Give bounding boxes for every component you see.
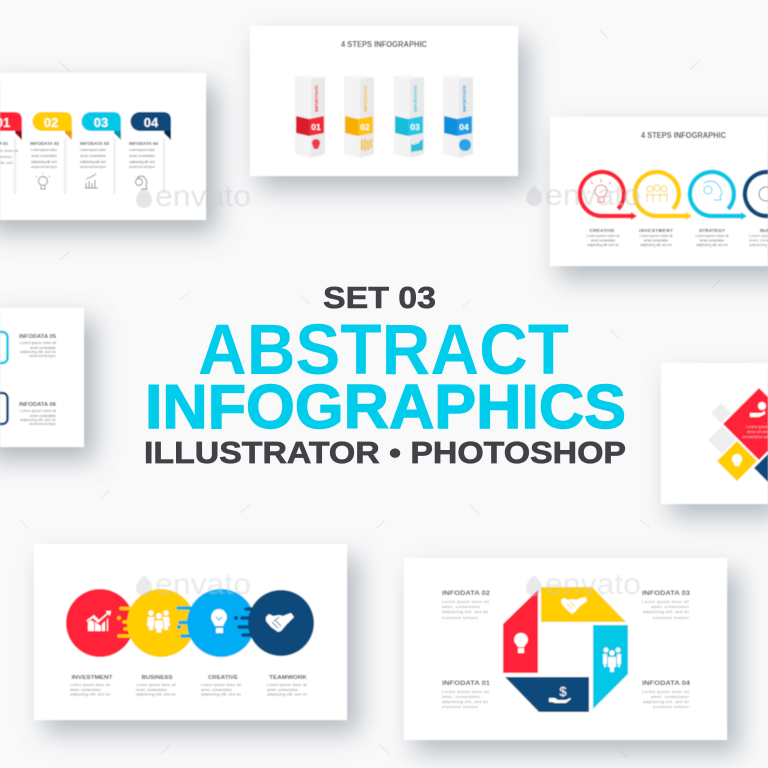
text: infodata 02: adipiscing elit, sed do [442,609,489,614]
icon: people [147,610,170,633]
text: infodata 04: eiusmod tempor [653,704,690,709]
circle: red investment [66,589,134,657]
icon: light bulb [732,454,742,466]
column text 02: amet, consectetur [31,153,58,158]
text: infodata 02: INFODATA 02 [442,590,490,597]
column text 02: Lorem ipsum dolor [31,147,58,152]
watermark: envato bottom right: envato [545,568,641,601]
column 01: IMPORTANTE [314,85,319,112]
label: strategy [696,228,729,247]
label: business [749,228,768,247]
watermark: envato bottom left: envato [155,568,251,601]
text: infodata 06: adipiscing elit, sed do [20,417,57,422]
icon: light bulb [514,633,528,653]
icon: light bulb [211,609,227,633]
icon: hand with coin [750,402,766,417]
navy diamond [754,454,768,482]
text: infodata 01: eiusmod tempor [442,704,479,709]
connector: navy dashes [239,609,254,635]
text: infodata 01: adipiscing elit, sed do [442,699,489,704]
heading: 4 STEPS INFOGRAPHIC [341,40,427,49]
label: business: Lorem ipsum dolor sit [136,682,177,687]
label: business: amet, consectetur [136,687,168,692]
label: creative: adipiscing elit, sed do [201,692,242,696]
text: infodata 05: INFODATA 05 [19,334,56,340]
text: infodata 05 [19,334,57,358]
column 02: 02 [360,122,370,132]
panel: 3D columns card [250,26,528,189]
label: strategy: adipiscing elit, sed do [696,242,729,247]
text: infodata 04 [642,680,690,709]
tab 03: 03 [94,115,108,130]
label: investment: INVESTMENT [639,228,673,234]
connector: blue dashes [178,608,193,636]
column text 04: INFODATA 04 [129,141,158,146]
box 06 [0,393,8,424]
heading: 4 STEPS INFOGRAPHIC [641,131,726,140]
icon: handshake [561,597,587,614]
label: creative: Lorem ipsum dolor sit [586,233,620,238]
tab 04 [130,112,171,140]
title block [144,280,626,470]
tab 02: 02 [44,115,58,130]
label: strategy: Lorem ipsum dolor sit [696,233,729,238]
label: investment: amet, consectetur [644,238,669,242]
text: infodata 05: adipiscing elit, sed do [20,349,57,354]
text: infodata 02 [442,590,490,620]
segment: red [503,590,538,673]
column text 03: eiusmod tempor [80,164,107,169]
box 05 [0,332,8,363]
text: infodata 01 [442,680,490,709]
label: investment: adipiscing elit, sed do [70,692,111,696]
icon: handshake [266,613,294,632]
column text 03 [80,141,109,169]
label: business: adipiscing elit, sed do [136,692,177,696]
column text 04 [129,141,158,169]
icon: light bulb [588,179,614,202]
label: teamwork: TEAMWORK [269,675,308,681]
panel: diamonds card [661,363,768,517]
column 03 [394,75,424,158]
circle: yellow business [117,589,195,657]
text: infodata 05: eiusmod tempor [29,353,57,358]
grey diamond large [708,426,736,454]
column 02 [344,75,374,158]
column 01 [295,75,325,158]
tab 02 [32,112,72,140]
column 04: IMPORTANTE [462,85,467,112]
icon: head outline [136,176,147,189]
text: infodata 01: Lorem ipsum dolor sit [442,689,490,694]
column text 04: Lorem ipsum dolor [129,147,156,152]
text: infodata 06: eiusmod tempor [29,421,57,426]
column text 04: amet, consectetur [129,153,156,158]
text: infodata 06: Lorem ipsum dolor sit [20,408,57,413]
column text 02 [30,141,59,169]
text: infodata 03: INFODATA 03 [642,590,690,597]
icon: light bulb outline [36,173,50,189]
label: creative: CREATIVE [590,228,615,234]
text: infodata 05: Lorem ipsum dolor sit [20,340,57,345]
text: infodata 01: amet, consectetur [442,694,481,699]
label: creative [201,675,242,696]
watermark: envato top left: envato [155,180,251,213]
circle: blue creative [177,589,255,657]
arrow circle: business [745,172,768,216]
text: infodata 05: amet, consectetur [30,345,57,350]
label: creative: amet, consectetur [201,687,233,692]
icon: people [647,185,667,202]
icon: bar chart growth [87,611,111,631]
circle: navy teamwork [234,590,314,656]
column text 02: adipiscing elit, sed [31,159,57,164]
label: teamwork: Lorem ipsum dolor sit [267,682,308,687]
icon: people [603,648,621,672]
text: infodata 04: amet, consectetur [651,694,690,699]
column text 01 [0,141,19,165]
text: infodata 02: amet, consectetur [442,604,481,609]
text: infodata 02: eiusmod tempor [442,615,479,620]
column text 03: amet, consectetur [80,153,107,158]
label: teamwork [267,675,308,696]
label: creative: adipiscing elit, sed do [587,242,620,247]
column 03: IMPORTANTE [413,85,418,112]
text: infodata 04: adipiscing elit, sed do [643,699,690,704]
label: investment: adipiscing elit, sed do [640,242,673,247]
title: set 03: SET 03 [323,280,436,315]
tab 04: 04 [144,115,159,130]
label: strategy: amet, consectetur [700,238,725,242]
label: investment [639,228,673,247]
column text 02: INFODATA 02 [30,141,59,146]
grey diamond small [711,403,731,423]
icon: growth chart outline [85,174,98,188]
label: investment: Lorem ipsum dolor sit [640,233,673,238]
text: infodata 04: INFODATA 04 [642,680,690,687]
label: business: BUSINESS [142,675,173,681]
connector: yellow dashes [119,608,136,636]
icon: hand with dollar: $ [559,684,567,699]
label: teamwork: amet, consectetur [267,687,299,692]
segment: cyan [593,625,628,709]
tab 03 [82,112,121,140]
text: infodata 01: INFODATA 01 [442,680,490,687]
label: creative [586,228,620,247]
column text 04: eiusmod tempor [129,164,156,169]
arrow circle: creative [580,172,637,220]
column text 02: eiusmod tempor [31,164,58,169]
label: teamwork: adipiscing elit, sed do [267,692,308,696]
column 04: 04 [459,122,469,132]
text: infodata 03: amet, consectetur [651,604,690,609]
column text 03: adipiscing elit, sed [80,159,106,164]
text: infodata 03: adipiscing elit, sed do [643,609,690,614]
segment: yellow [541,587,626,622]
label: creative: Lorem ipsum dolor sit [201,682,242,687]
icon: head [704,181,722,200]
column 03: 03 [410,122,420,132]
label: business [136,675,177,696]
text: infodata 06 [19,402,57,426]
label: investment: INVESTMENT [72,675,113,681]
label: creative: CREATIVE [208,675,238,681]
title: abstract: ABSTRACT [198,311,569,390]
column 04 [443,75,473,158]
title: infographics: INFOGRAPHICS [145,373,626,442]
text: lorem [742,424,768,439]
panel: octagon card [404,558,739,753]
label: strategy: STRATEGY [699,228,726,234]
panel: ribbon tabs card [0,73,216,232]
text: infodata 04: Lorem ipsum dolor sit [642,689,690,694]
label: creative: amet, consectetur [590,238,616,242]
column text 04: adipiscing elit, sed [129,159,155,164]
column 02: IMPORTANTE [363,85,368,112]
column 01: 01 [311,122,321,132]
red diamond [723,388,768,460]
watermark: envato top right: envato [545,179,641,212]
label: investment: amet, consectetur [70,687,102,692]
text: infodata 06: INFODATA 06 [19,402,56,408]
panel: circular arrows card [550,117,768,279]
text: infodata 02: Lorem ipsum dolor sit [442,599,490,604]
text: infodata 03: eiusmod tempor [653,615,690,620]
column text 03: INFODATA 03 [80,141,109,146]
text: infodata 03 [642,590,690,620]
segment: navy [505,677,589,712]
title: illustrator photoshop: ILLUSTRATOR • PHOTOSHOP [144,435,626,470]
yellow diamond [717,441,757,481]
label: investment: Lorem ipsum dolor sit [70,682,111,687]
text: infodata 06: amet, consectetur [30,413,57,418]
arrow circle: investment [635,172,692,220]
label: investment [70,675,113,696]
panel: joined circles card [34,544,359,733]
panel: rounded boxes card [0,308,94,459]
text: infodata 03: Lorem ipsum dolor sit [642,599,690,604]
column text 03: Lorem ipsum dolor [80,147,107,152]
tab 01 [0,112,22,140]
arrow circle: strategy [690,172,747,220]
